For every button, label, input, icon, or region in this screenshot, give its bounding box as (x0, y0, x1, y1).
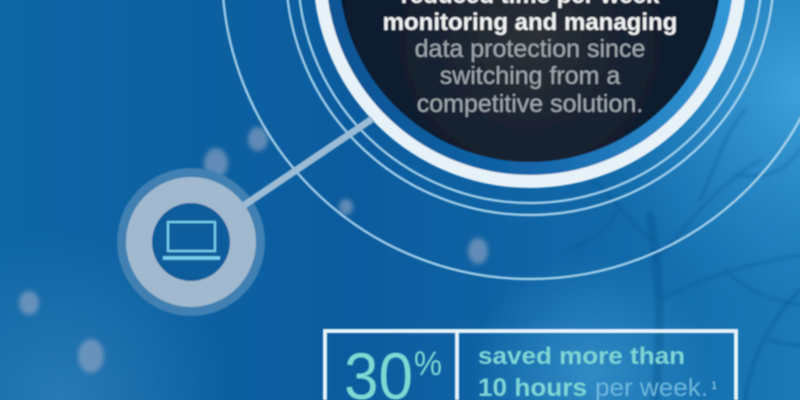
stat description (478, 343, 717, 400)
stat description: saved more than (478, 343, 685, 370)
main circle text (383, 0, 677, 118)
stat number: % (414, 345, 442, 383)
main circle (320, 0, 740, 182)
connector to stat box (528, 186, 532, 332)
connector to laptop node (243, 119, 372, 206)
stat box (325, 331, 736, 400)
main circle text: monitoring and managing (383, 9, 677, 36)
main circle text: switching from a (440, 62, 620, 90)
laptop node (117, 168, 265, 316)
background tree silhouette (570, 110, 800, 400)
thin concentric rings (222, 0, 800, 279)
icon: laptop (163, 222, 220, 258)
main circle text: data protection since (415, 35, 645, 63)
background bokeh dots (19, 127, 488, 373)
main circle text: competitive solution. (417, 90, 643, 118)
stat description: 1 (711, 380, 717, 392)
